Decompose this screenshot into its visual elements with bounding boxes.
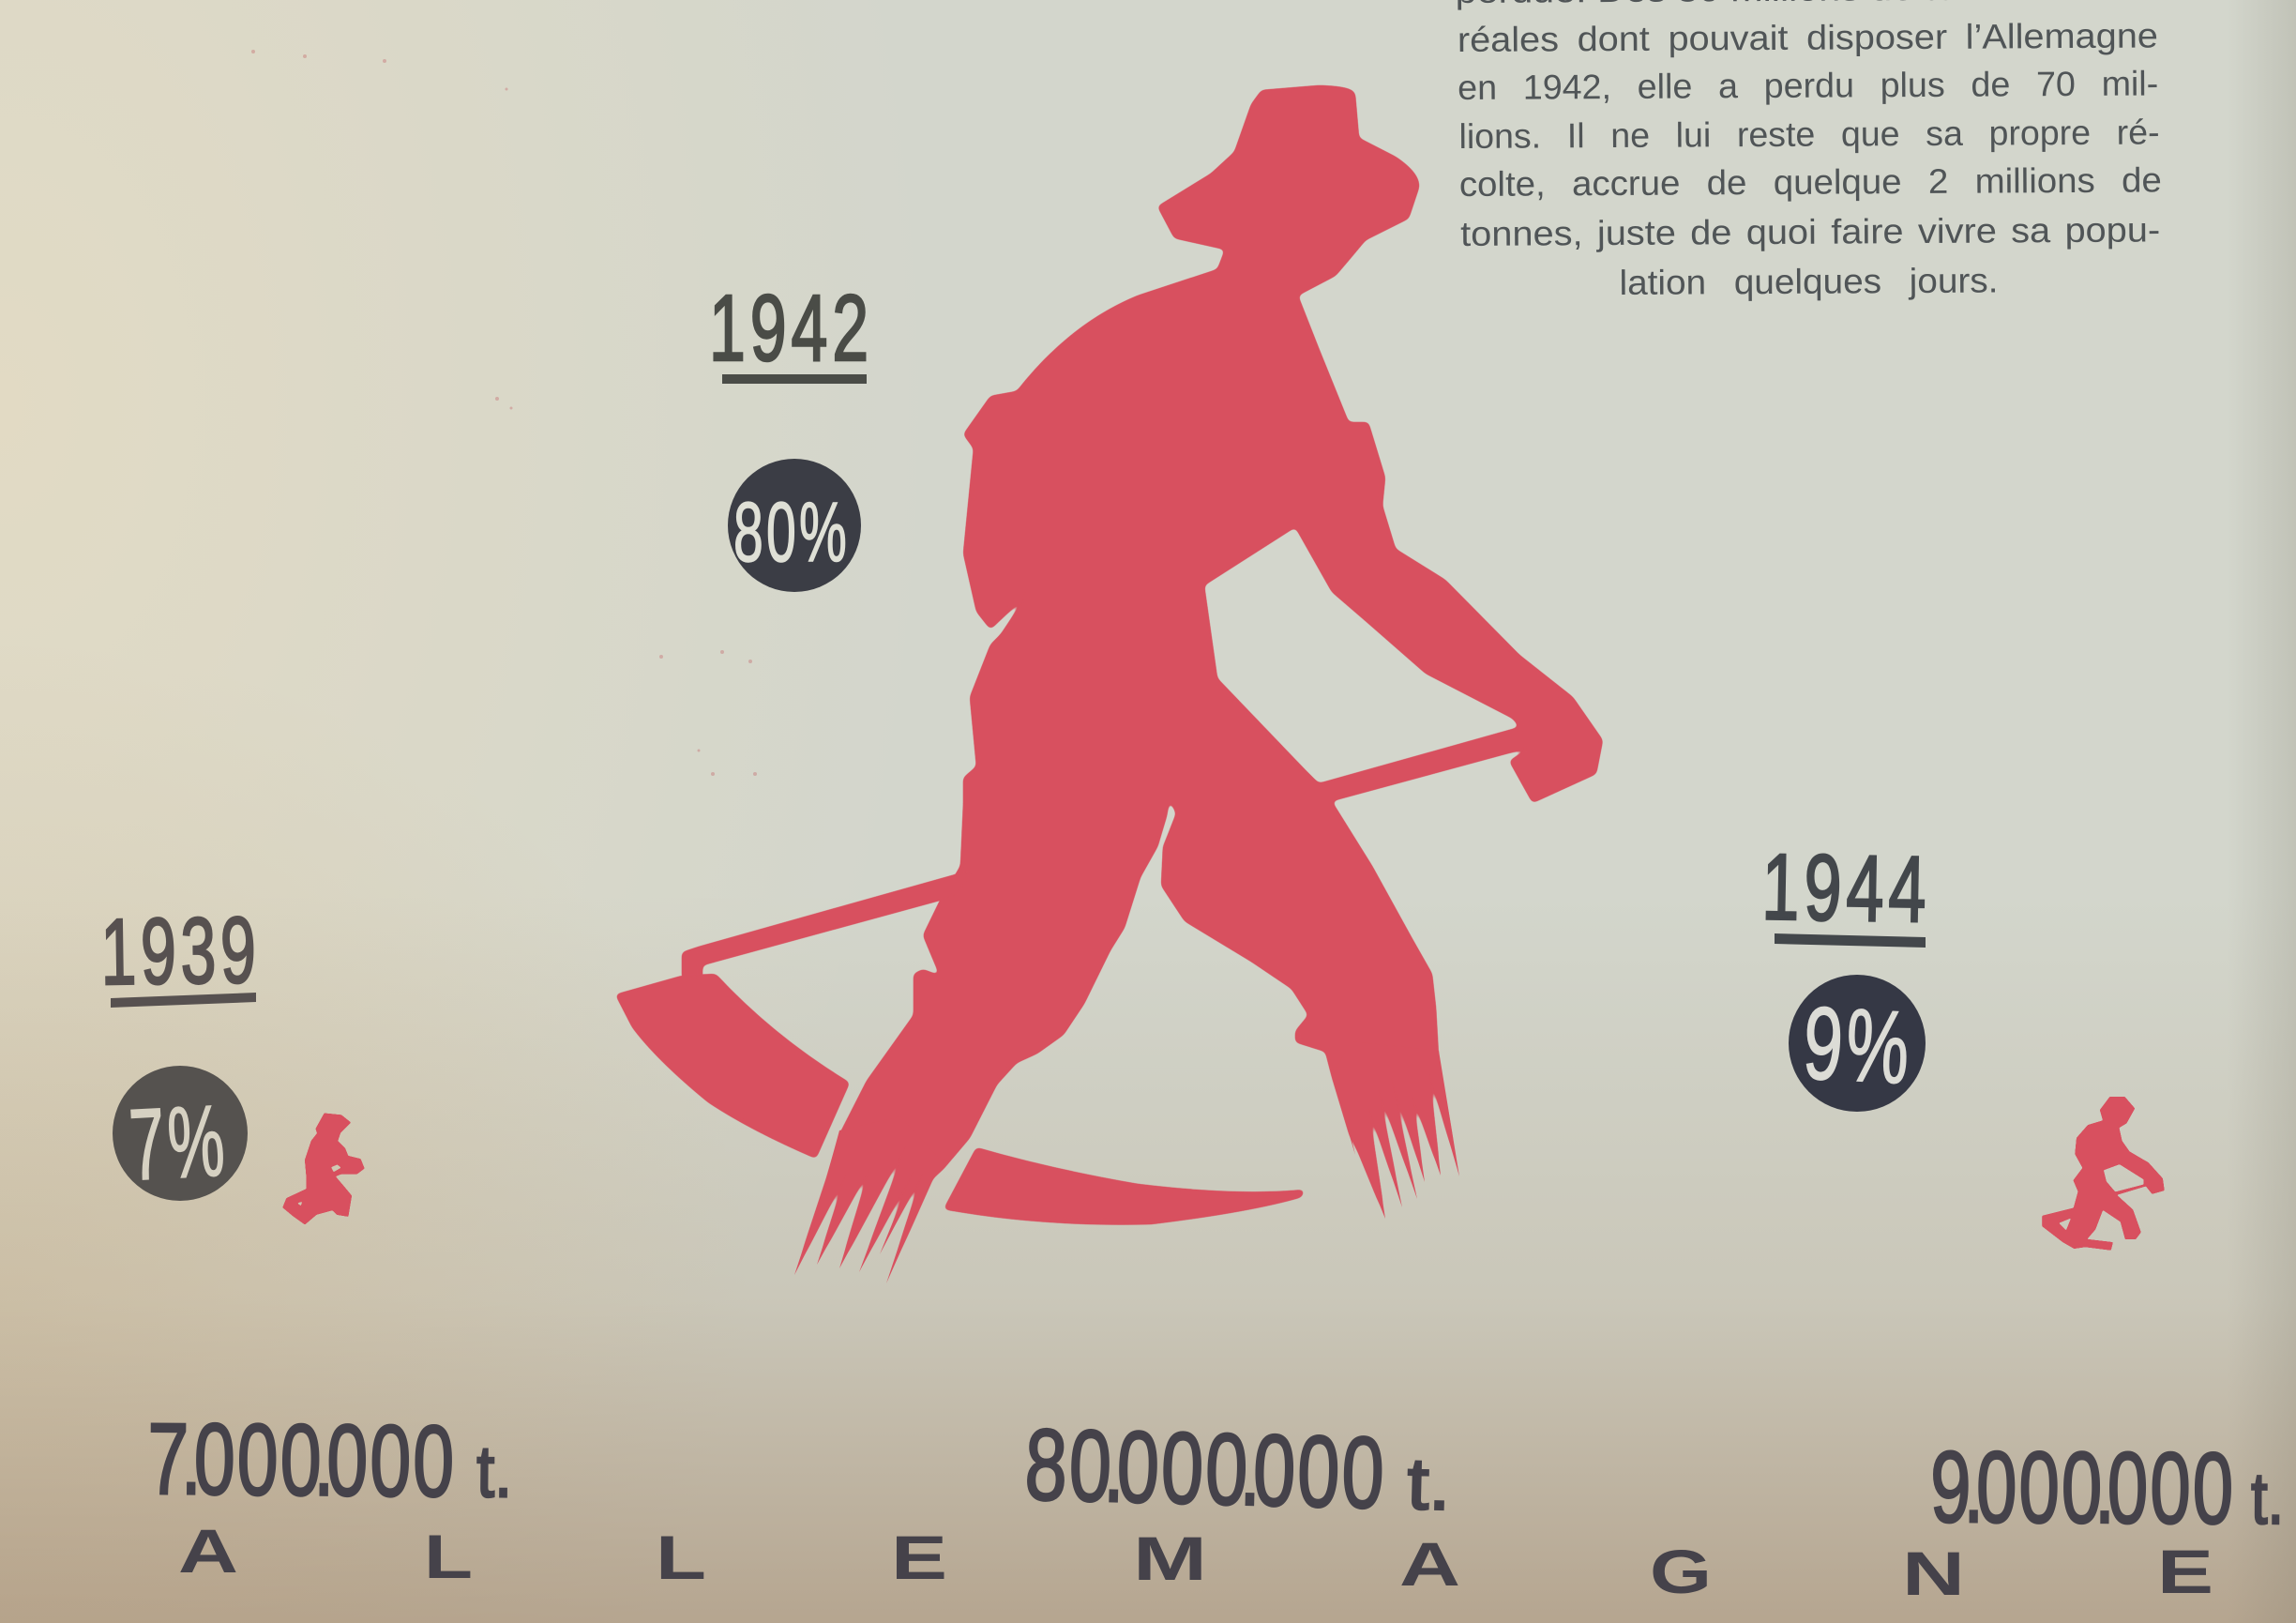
year block: 1944: [1761, 834, 2164, 1250]
percentage badge 80%: 80%: [733, 486, 850, 580]
front foot fringe: [1332, 1041, 1459, 1219]
text block: article extract: [1455, 0, 2163, 303]
tonnage: 9.000.000 t.: t.: [2251, 1457, 2284, 1540]
underline: [1775, 933, 1926, 948]
scythe blade, lower part: [944, 1147, 1305, 1224]
icon: small reaper 1944: [2043, 1098, 2164, 1250]
text block: article extract: lation quelques jours.: [1619, 261, 1999, 302]
percentage badge 7%: 7%: [127, 1083, 230, 1202]
heading: ALLEMAGNE spaced letters: M: [1133, 1524, 1207, 1593]
heading: ALLEMAGNE spaced letters: L: [424, 1522, 473, 1591]
heading: ALLEMAGNE spaced letters: A: [178, 1516, 238, 1585]
year block: 1942: [709, 276, 873, 592]
scythe handle: [682, 869, 975, 979]
underline: [722, 374, 867, 384]
heading: ALLEMAGNE spaced letters: E: [2157, 1537, 2213, 1606]
percentage badge 80%: [728, 459, 861, 592]
heading: ALLEMAGNE spaced letters: A: [1399, 1529, 1460, 1599]
text block: article extract: en 1942, elle a perdu plus de 70 mil-: [1458, 64, 2158, 107]
text block: article extract: tonnes, juste de quoi faire vivre sa popu-: [1460, 210, 2160, 253]
tonnage: 7.000.000 t.: 7.000.000: [147, 1402, 457, 1518]
heading: ALLEMAGNE spaced letters: [178, 1516, 2213, 1608]
tonnage: 80.000.000 t.: t.: [1406, 1442, 1452, 1525]
underline: [111, 993, 256, 1008]
icon: small reaper 1939: [284, 1115, 363, 1222]
heading: ALLEMAGNE spaced letters: G: [1650, 1537, 1712, 1606]
heading: ALLEMAGNE spaced letters: L: [656, 1523, 706, 1592]
text block: article extract: colte, accrue de quelque 2 millions de: [1459, 160, 2162, 204]
year label 1944: 1944: [1761, 834, 1932, 943]
back foot fringe: [794, 1116, 944, 1283]
scythe blade, upper part: [615, 974, 850, 1159]
percentage badge 9%: [1789, 975, 1926, 1112]
text block: article extract: lions. Il ne lui reste que sa propre ré-: [1458, 113, 2160, 156]
year label 1939: 1939: [100, 898, 261, 1005]
tonnage: 7.000.000 t.: t.: [476, 1430, 513, 1512]
text block: article extract: réales dont pouvait disposer l’Allemagne: [1458, 16, 2158, 59]
icon: large reaper silhouette, 1942 harvest: [615, 85, 1603, 1283]
percentage badge 7%: [113, 1066, 248, 1202]
heading: ALLEMAGNE spaced letters: N: [1902, 1539, 1965, 1608]
percentage badge 9%: 9%: [1801, 985, 1915, 1106]
tonnage: 9.000.000 t.: 9.000.000: [1930, 1430, 2236, 1545]
year label 1942: 1942: [709, 276, 873, 381]
heading: ALLEMAGNE spaced letters: E: [891, 1523, 947, 1592]
year block: 1939: [100, 898, 363, 1222]
reaper body and arm: [794, 85, 1603, 1283]
tonnage: 80.000.000 t.: 80.000.000: [1023, 1407, 1387, 1529]
